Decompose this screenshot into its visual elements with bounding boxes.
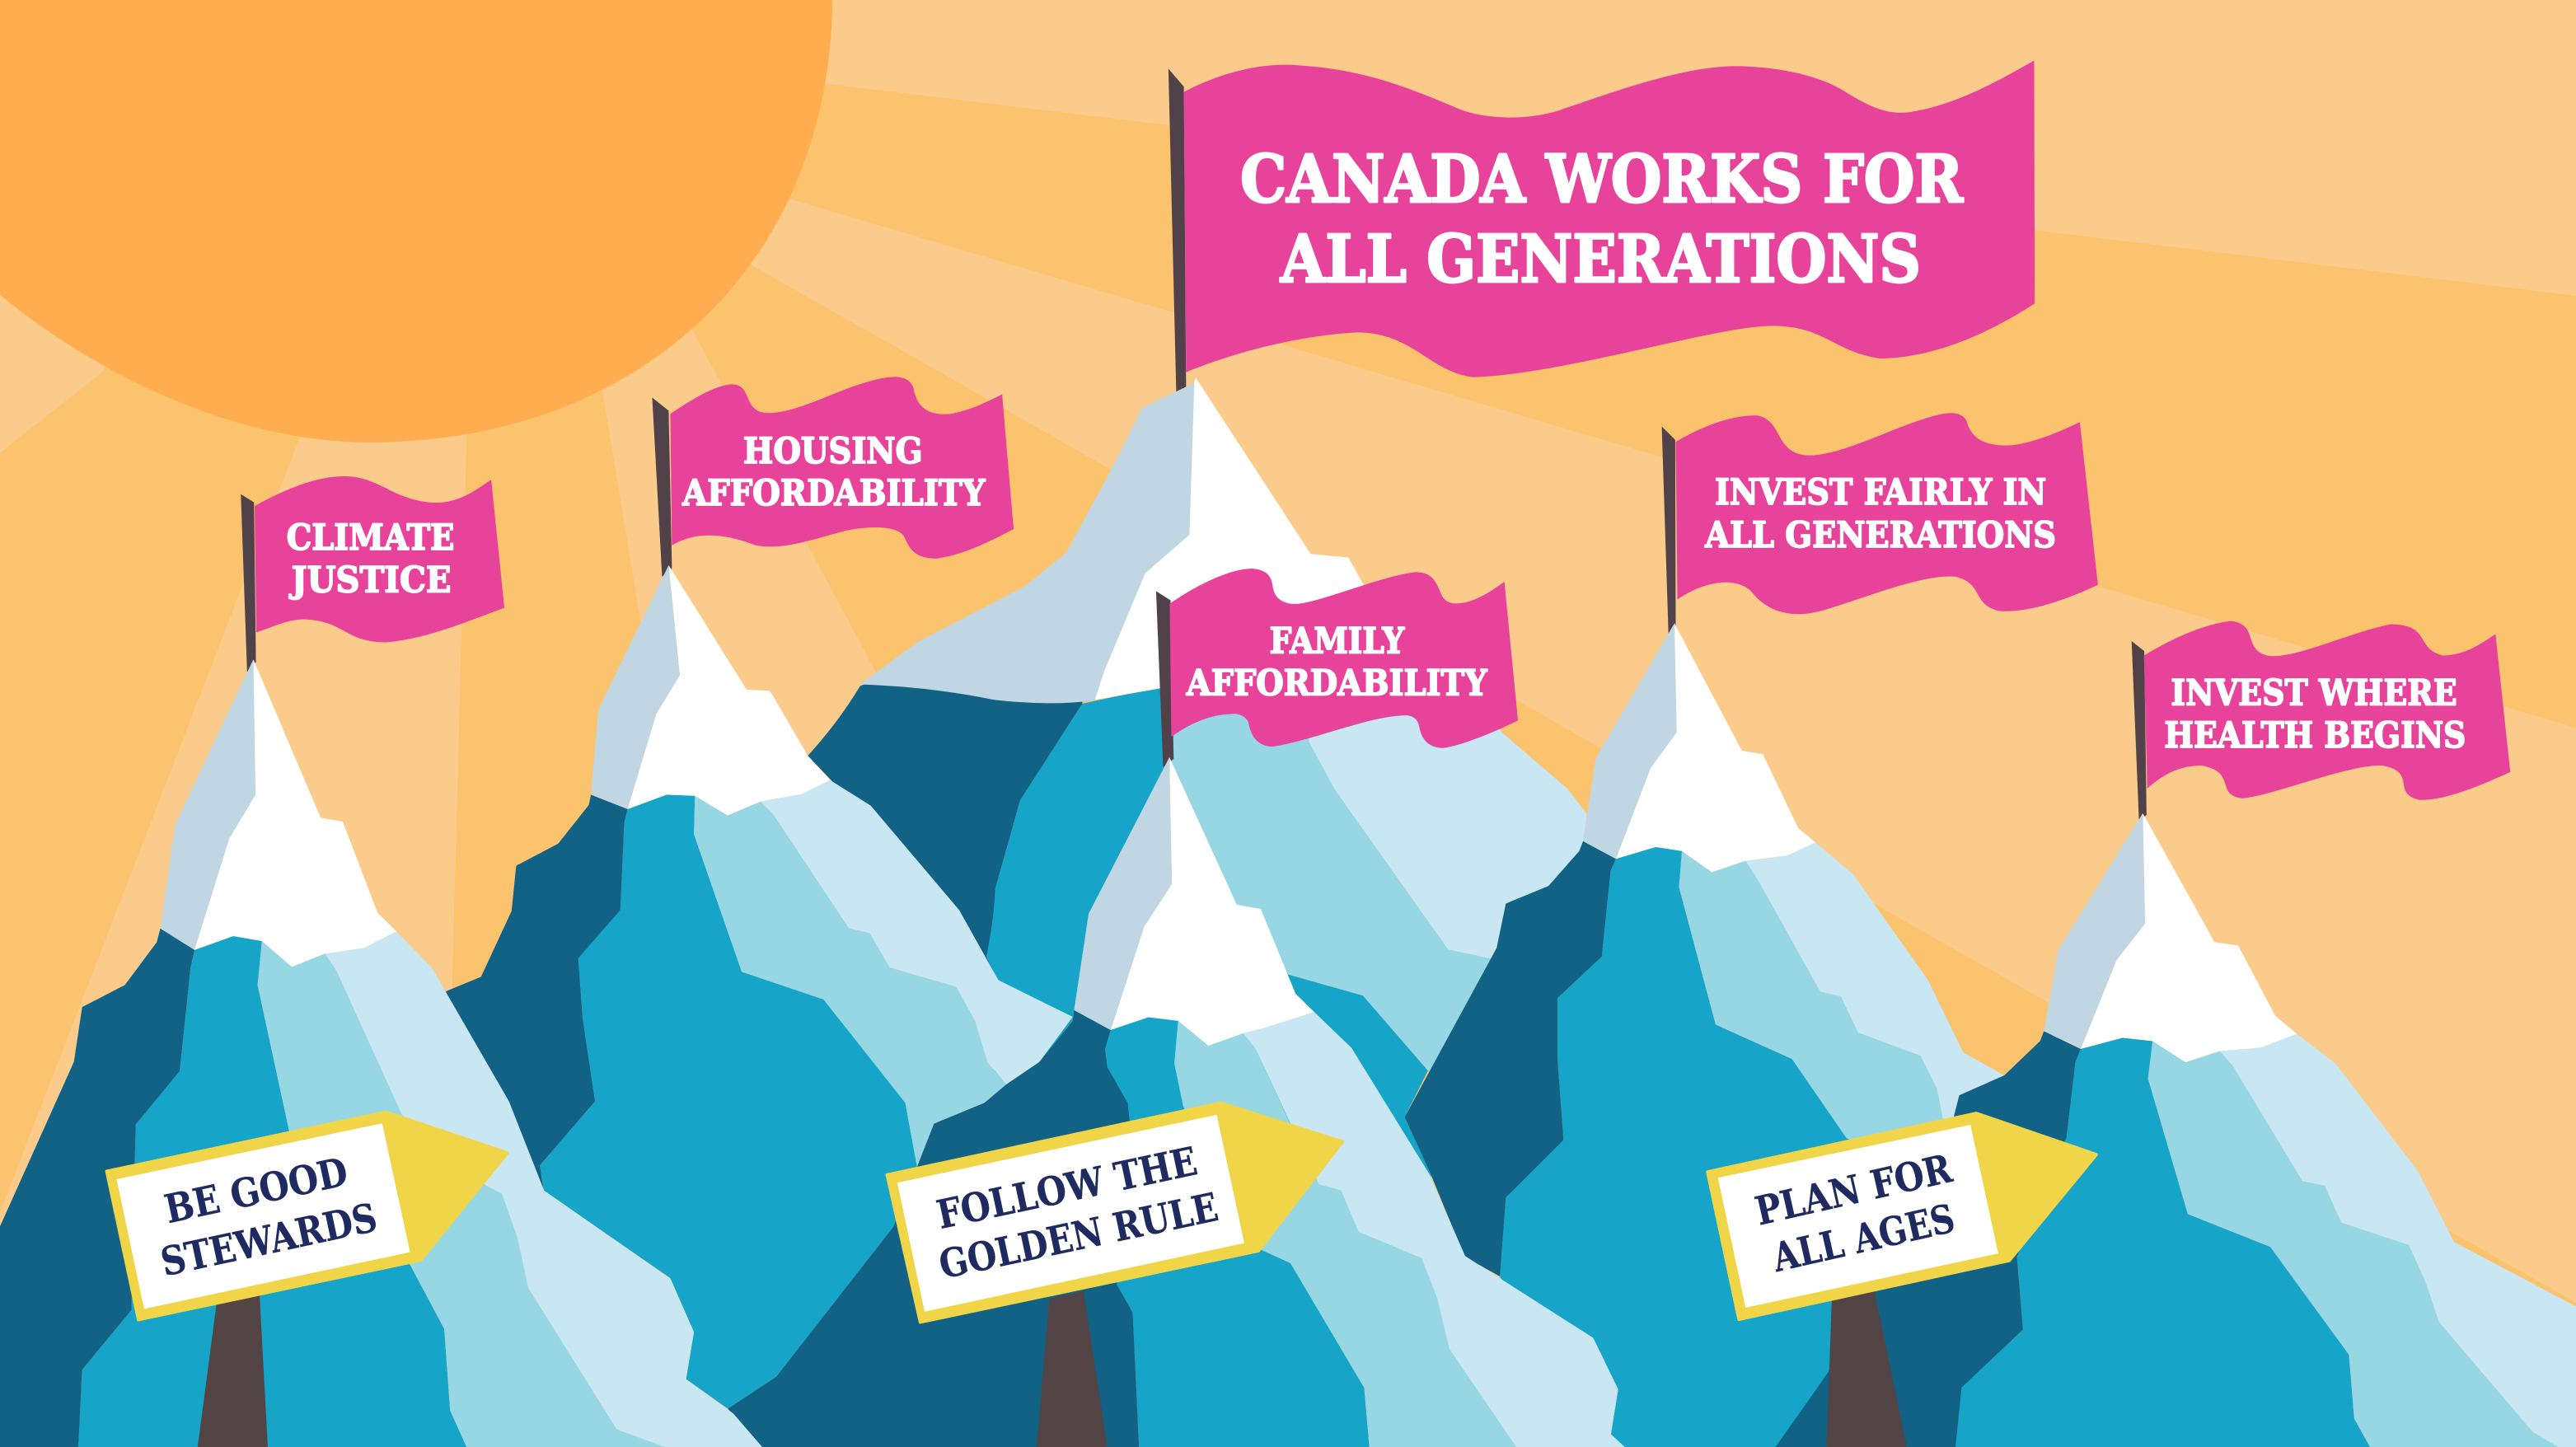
sign text: STEWARDS xyxy=(157,1195,382,1285)
mountain: family affordability xyxy=(728,757,1625,1447)
flag label: JUSTICE xyxy=(288,560,451,602)
sign: be good stewards xyxy=(107,1112,508,1447)
flag: invest where health begins xyxy=(2132,621,2510,822)
sign text: BE GOOD xyxy=(161,1149,352,1233)
sign text: PLAN FOR xyxy=(1751,1145,1957,1235)
mountain: housing xyxy=(446,565,1073,1409)
flag label: AFFORDABILITY xyxy=(1186,663,1487,704)
sign: plan for all ages xyxy=(1707,1113,2096,1447)
flag: invest fairly in all generations xyxy=(1662,413,2098,635)
mountain: invest where health begins xyxy=(1776,813,2576,1447)
mountain: invest fairly xyxy=(1405,623,2004,1447)
flag label: FAMILY xyxy=(1270,620,1404,662)
back centre mountain xyxy=(808,378,1587,1248)
sign: follow the golden rule xyxy=(888,1103,1342,1447)
sign text: FOLLOW THE xyxy=(933,1138,1201,1239)
title: ALL GENERATIONS xyxy=(1280,220,1921,297)
flag label: HEALTH BEGINS xyxy=(2164,715,2466,756)
flag label: INVEST FAIRLY IN xyxy=(1715,472,2046,513)
flag: housing affordability xyxy=(652,377,1014,577)
mountain: climate justice xyxy=(0,659,762,1447)
sign text: GOLDEN RULE xyxy=(935,1184,1222,1289)
sign text: ALL AGES xyxy=(1768,1196,1959,1281)
flag label: HOUSING xyxy=(743,431,923,472)
flag label: ALL GENERATIONS xyxy=(1704,515,2056,556)
main flag: Canada works for all generations xyxy=(1169,60,2035,394)
flag label: CLIMATE xyxy=(287,517,454,559)
sun xyxy=(0,0,832,443)
flag label: INVEST WHERE xyxy=(2171,672,2457,714)
title: CANADA WORKS FOR xyxy=(1240,140,1964,218)
flag: climate justice xyxy=(241,476,504,672)
flag: family affordability xyxy=(1156,569,1518,767)
flag label: AFFORDABILITY xyxy=(681,473,986,514)
